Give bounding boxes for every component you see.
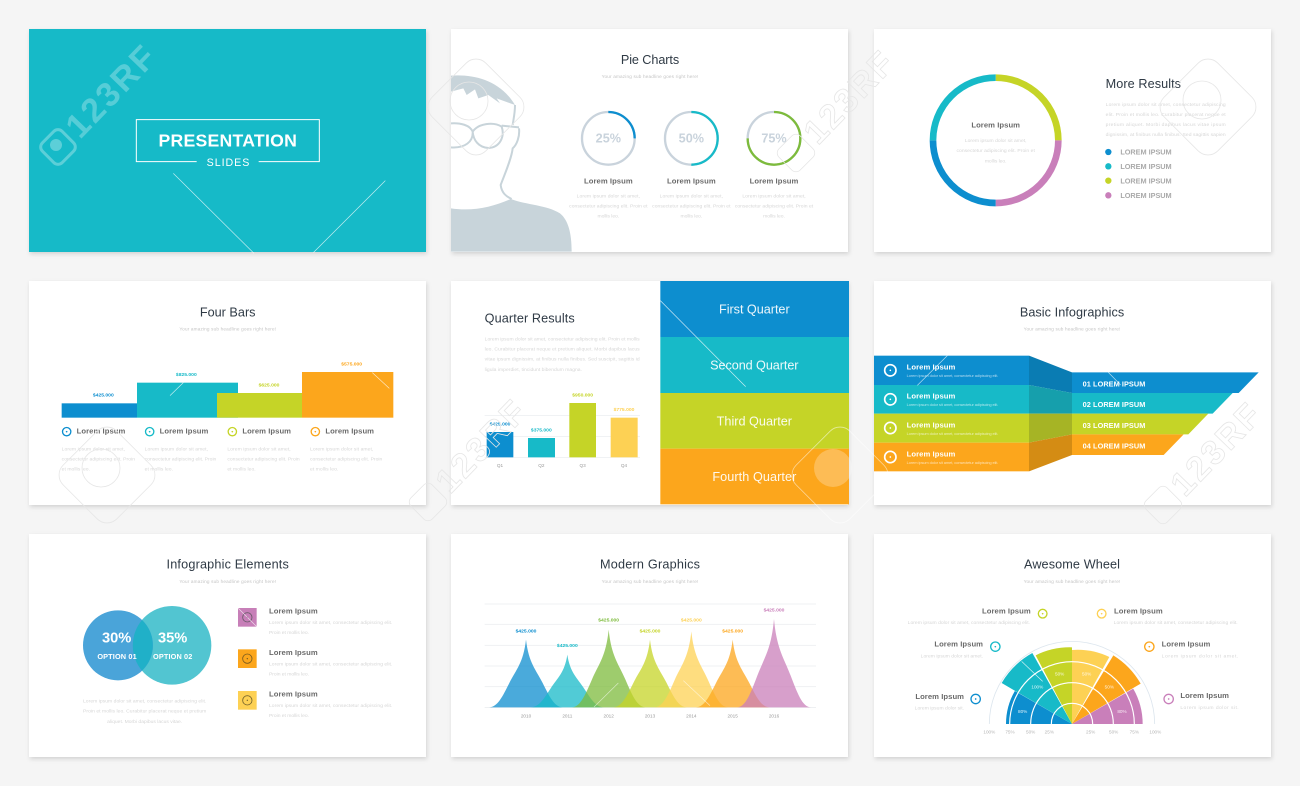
left labels: Lorem Ipsum [907,391,956,400]
quarter blocks [660,281,849,504]
peak chart: $425.000 [681,618,702,624]
semicircular wheel chart: 100% [983,730,995,735]
peak chart: $425.000 [764,608,785,614]
wheel label: yellow: Lorem ipsum dolor sit amet, consectetur adipiscing elit. [1114,620,1238,626]
venn diagram: 30% [102,630,131,646]
body text: elit. Proin et mollis leo. Curabitur placerat neque et [1106,112,1226,118]
item: yellow: Lorem Ipsum [269,689,318,698]
panel: pie charts [451,29,848,252]
semicircular wheel chart: 50% [1026,730,1035,735]
heading: Quarter Results [485,312,575,326]
subtitle: Your amazing sub headline goes right here! [179,579,276,584]
item: purple [238,607,392,636]
item 4 [310,427,383,473]
donut: 25%: consectetur adipiscing elit. Proin et [569,204,648,210]
semicircular wheel chart: 25% [1086,730,1095,735]
right labels [1083,379,1145,450]
item 4: et mollis leo. [310,467,338,473]
ring chart [933,78,1058,203]
peak chart: 2014 [686,713,697,718]
item: orange: Lorem Ipsum [269,648,318,657]
wheel label: purple: Lorem Ipsum [1180,691,1229,700]
item 3: Lorem ipsum dolor sit amet, [227,447,291,453]
wheel label: teal: Lorem Ipsum [934,640,983,649]
quarterly column chart: Q4 [621,463,628,468]
body text: vitae ipsum dignissim, at finibus nulla finibus. Sed suscipit, sagittis id [485,357,640,363]
donut: 25% [569,112,648,220]
right labels: 03 LOREM IPSUM [1083,421,1145,430]
left labels: Lorem ipsum dolor sit amet, consectetur adipiscing elit. [907,431,998,436]
peak chart: $425.000 [516,628,537,634]
item 3 [227,427,300,473]
stepped bar chart [62,362,393,418]
quarterly column chart: $375.000 [531,428,552,434]
watermarks: 123RF [1163,397,1269,504]
legend: LOREM IPSUM [1120,148,1172,157]
body text: ligula imperdiet, tincidunt bibendum magna. [485,367,582,373]
right labels: 02 LOREM IPSUM [1083,400,1145,409]
peak chart: $425.000 [557,643,578,649]
peak chart: 2013 [645,713,656,718]
peak chart: $425.000 [640,628,661,634]
wheel label: teal: Lorem ipsum dolor sit amet. [921,653,983,659]
legend: LOREM IPSUM [1120,191,1172,200]
illustration: man with glasses [451,75,572,252]
quarterly column chart: $950.000 [572,393,593,399]
item 3: Lorem Ipsum [242,427,291,436]
peak chart: 2010 [521,713,532,718]
wheel label: teal [921,640,1000,659]
cover heading: PRESENTATION [158,130,297,150]
subtitle: Your amazing sub headline goes right here! [602,579,698,584]
left labels [885,362,998,465]
item: yellow: Proin et mollis leo. [269,713,309,719]
quarterly column chart: $775.000 [614,407,635,413]
cover decorative lines [173,173,385,253]
semicircular wheel chart: 25% [1045,730,1054,735]
semicircular wheel chart: 80% [1117,709,1127,714]
wheel label: orange: Lorem Ipsum [1162,640,1211,649]
quarterly column chart: Q3 [580,463,586,468]
donut: 75% [735,112,814,220]
title: Awesome Wheel [1024,558,1120,572]
item 4: Lorem Ipsum [325,427,374,436]
right labels: 04 LOREM IPSUM [1083,441,1145,450]
cover subheading: SLIDES [207,157,249,169]
body text: leo. Curabitur placerat neque et pretium aliquet. Morbi dapibus lacus [485,347,640,353]
left labels: Lorem Ipsum [907,362,956,371]
panel: basic infographics [874,281,1271,505]
donut: 25%: mollis leo. [597,214,619,220]
ring centre text [956,121,1035,165]
quarterly column chart: Q2 [538,463,545,468]
item: purple: Proin et mollis leo. [269,630,309,636]
item: purple: Lorem ipsum dolor sit amet, consectetur adipiscing elit. [269,620,392,626]
peak chart: $425.000 [722,628,743,634]
heading: More Results [1106,77,1181,91]
semicircular wheel chart: 80% [1018,709,1027,714]
wheel label: purple: Lorem ipsum dolor sit. [1180,705,1239,711]
peak chart: $425.000 [598,618,619,624]
folded ribbon shapes [874,356,1259,471]
wheel label: lime: Lorem Ipsum [982,607,1031,616]
title: Modern Graphics [600,558,700,572]
venn description: Proin et mollis leo. Curabitur placerat neque et pretium [83,709,206,715]
left labels: Lorem Ipsum [907,421,956,430]
stepped bar chart: $625.000 [259,382,280,388]
left labels: Lorem ipsum dolor sit amet, consectetur adipiscing elit. [907,402,998,407]
donut: 75%: mollis leo. [763,214,785,220]
item: purple: Lorem Ipsum [269,607,318,616]
watermarks: 123RF [796,45,902,152]
item 1: et mollis leo. [62,467,90,473]
watermarks: 123RF [58,39,164,146]
ring centre text: mollis leo. [985,159,1006,165]
body text: pretium aliquet. Morbi dapibus lacus vitae ipsum [1106,122,1226,128]
item 2 [145,427,217,473]
title: Pie Charts [621,53,679,67]
quarter blocks: Third Quarter [717,414,792,428]
semicircular wheel chart: 50% [1055,672,1064,677]
quarter blocks: Second Quarter [710,358,798,372]
stepped bar chart: $575.000 [341,362,362,368]
wheel label: yellow: Lorem Ipsum [1114,607,1163,616]
donut: 25%: 25% [596,132,621,146]
wheel label: orange [1145,640,1238,659]
item: orange: Proin et mollis leo. [269,672,309,678]
quarter blocks: Fourth Quarter [712,470,796,484]
legend: LOREM IPSUM [1120,162,1172,171]
venn diagram [83,606,211,685]
item 2: Lorem Ipsum [160,427,209,436]
legend: LOREM IPSUM [1120,176,1172,185]
quarterly column chart: Q1 [497,463,504,468]
left labels: Lorem Ipsum [907,450,956,459]
quarter blocks: First Quarter [719,303,790,317]
venn diagram: OPTION 01 [97,652,137,661]
wheel label: lime: Lorem ipsum dolor sit amet, consectetur adipiscing elit. [908,620,1030,626]
body text: Lorem ipsum dolor sit amet, consectetur adipiscing [1106,102,1226,108]
wheel label: blue: Lorem Ipsum [915,692,964,701]
item: orange [238,648,392,678]
item: yellow: Lorem ipsum dolor sit amet, consectetur adipiscing elit. [269,703,392,709]
venn diagram: OPTION 02 [153,652,192,661]
peak chart [485,604,816,718]
item: orange: Lorem ipsum dolor sit amet, consectetur adipiscing elit. [269,662,392,668]
semicircular wheel chart: 75% [1005,730,1015,735]
panel: modern graphics [451,534,848,757]
legend [1105,148,1172,200]
ring centre text: Lorem Ipsum [971,121,1020,130]
item 3: et mollis leo. [227,467,256,473]
title: Infographic Elements [166,558,289,572]
wheel label: blue: Lorem ipsum dolor sit. [915,706,964,712]
venn description: Lorem ipsum dolor sit amet, consectetur adipiscing elit. [83,699,206,705]
wheel label: lime [908,607,1047,626]
donut: 50% [652,112,731,220]
left labels: Lorem ipsum dolor sit amet, consectetur adipiscing elit. [907,460,998,465]
peak chart: 2011 [562,713,573,718]
body text [485,337,640,373]
peak chart: 2012 [603,713,614,718]
panel: presentation cover [29,29,426,253]
semicircular wheel chart: 50% [1082,672,1091,677]
subtitle: Your amazing sub headline goes right here! [1024,579,1120,584]
item 2: Lorem ipsum dolor sit amet, [145,447,208,453]
watermarks [38,39,1269,529]
ring centre text: consectetur adipiscing elit. Proin et [956,148,1035,154]
title: Four Bars [200,306,255,320]
semicircular wheel chart [983,641,1161,735]
donut: 50%: consectetur adipiscing elit. Proin et [652,204,731,210]
donut: 50%: 50% [679,132,704,146]
donut: 25%: Lorem Ipsum [584,176,633,185]
body text: Lorem ipsum dolor sit amet, consectetur adipiscing elit. Proin et mollis [485,337,640,343]
donut: 75%: 75% [761,132,787,146]
item 4: Lorem ipsum dolor sit amet, [310,447,373,453]
panel: four bars [29,281,426,505]
donut: 75%: Lorem ipsum dolor sit amet, [742,194,806,200]
wheel label: blue [915,692,980,712]
venn diagram: 35% [158,630,187,646]
semicircular wheel chart: 50% [1105,685,1114,690]
stepped bar chart: $825.000 [176,372,197,378]
title: Basic Infographics [1020,306,1124,320]
item 2: et mollis leo. [145,467,173,473]
panel: quarter results [451,281,849,505]
watermarks: 123RF [428,394,534,501]
item: yellow [238,689,392,719]
item 1 [62,427,135,473]
venn description: aliquet. Morbi dapibus lacus vitae. [107,719,182,725]
wheel label: yellow [1097,607,1238,626]
cover title box [136,120,319,162]
body text: dignissim, at finibus nulla finibus. Sed sagittis sapien [1106,132,1226,138]
panel: infographic elements [29,534,426,757]
right labels: 01 LOREM IPSUM [1083,379,1145,388]
donut: 75%: consectetur adipiscing elit. Proin et [735,204,814,210]
item 1: consectetur adipiscing elit. Proin [62,457,135,463]
donut: 50%: Lorem Ipsum [667,176,716,185]
donut: 50%: Lorem ipsum dolor sit amet, [660,194,723,200]
item 1: Lorem ipsum dolor sit amet, [62,447,125,453]
panel: more results [874,29,1271,252]
item 1: Lorem Ipsum [77,427,126,436]
semicircular wheel chart: 50% [1109,730,1118,735]
wheel label: purple [1164,691,1239,711]
subtitle: Your amazing sub headline goes right here! [602,74,698,79]
peak chart: 2015 [727,713,738,718]
item 2: consectetur adipiscing elit. Proin [145,457,217,463]
item 4: consectetur adipiscing elit. Proin [310,457,383,463]
semicircular wheel chart: 75% [1130,730,1139,735]
stepped bar chart: $425.000 [93,393,114,399]
donut: 50%: mollis leo. [680,214,702,220]
quarterly column chart [485,393,640,468]
panel: awesome wheel [874,534,1271,757]
wheel label: orange: Lorem ipsum dolor sit amet. [1162,653,1238,659]
semicircular wheel chart: 100% [1031,685,1043,690]
donut: 75%: Lorem Ipsum [750,176,799,185]
item 3: consectetur adipiscing elit. Proin [227,457,300,463]
subtitle: Your amazing sub headline goes right here! [179,326,276,331]
left labels: Lorem ipsum dolor sit amet, consectetur adipiscing elit. [907,373,998,378]
peak chart: 2016 [769,713,780,718]
subtitle: Your amazing sub headline goes right here! [1024,326,1120,331]
quarterly column chart: $425.000 [490,422,511,428]
ring centre text: Lorem ipsum dolor sit amet, [965,138,1026,144]
semicircular wheel chart: 100% [1149,730,1161,735]
body text [1106,102,1226,138]
donut: 25%: Lorem ipsum dolor sit amet, [577,194,640,200]
venn description [83,699,206,725]
